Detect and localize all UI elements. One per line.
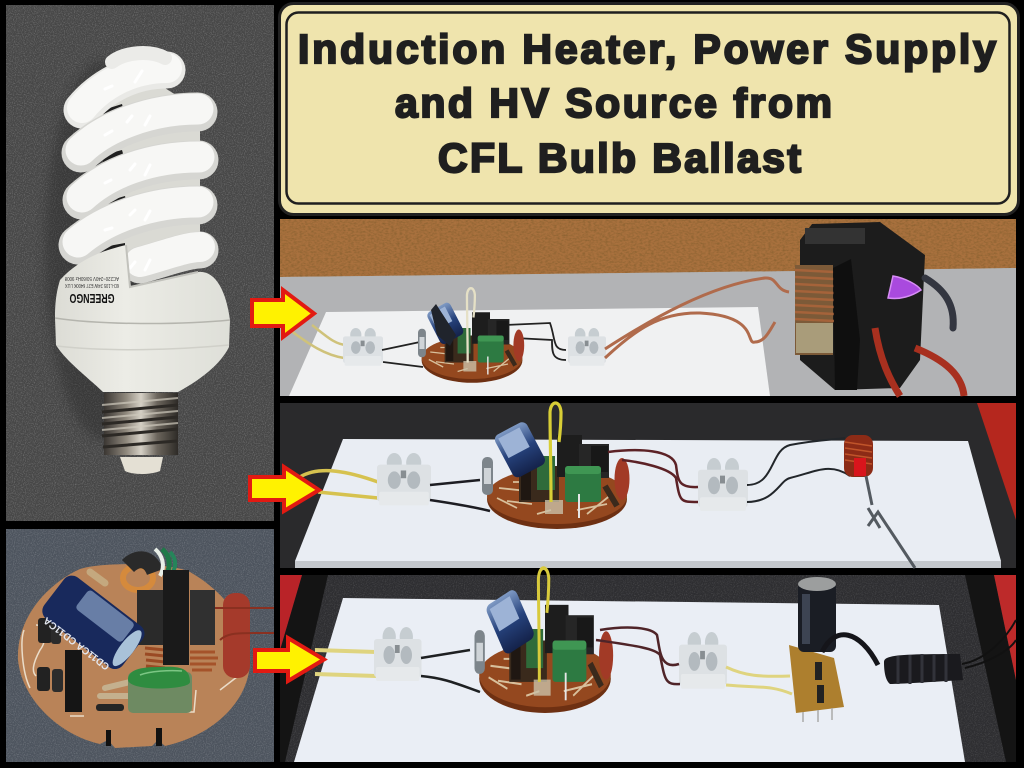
yellow input wires bbox=[315, 650, 376, 676]
tall black capacitor bbox=[798, 577, 836, 652]
yellow input wires bbox=[300, 471, 378, 498]
white board bbox=[294, 598, 965, 762]
label on bulb bbox=[65, 275, 119, 306]
resistors and diodes bbox=[37, 572, 130, 712]
terminal block right bbox=[568, 328, 606, 366]
maroon output wires bbox=[596, 628, 680, 684]
purple arc bbox=[888, 276, 921, 299]
ballast board bbox=[474, 568, 613, 713]
icon: metal screw base bbox=[102, 393, 178, 474]
metal rod and tweezers bbox=[866, 476, 915, 568]
blue electrolytic capacitor bbox=[35, 572, 148, 678]
wires to ballast bbox=[382, 323, 566, 367]
red HV wire bbox=[875, 328, 964, 396]
title text: Induction Heater, Power Supply bbox=[298, 26, 996, 72]
blue electrolytic capacitor: CD11CA CD11CA bbox=[42, 614, 112, 672]
arrow: bottom bbox=[255, 638, 324, 681]
terminal block left bbox=[343, 328, 383, 366]
terminal block left bbox=[377, 453, 431, 505]
arrow: top bbox=[252, 290, 314, 337]
title text: CFL Bulb Ballast bbox=[438, 135, 801, 181]
toroid inductor bbox=[123, 549, 175, 590]
label on bulb: AC220~240V 50/60Hz 900lf bbox=[65, 275, 119, 281]
terminal block left bbox=[374, 627, 422, 681]
icon: spiral lamp tube bbox=[78, 53, 200, 270]
arrow: middle bbox=[250, 467, 319, 511]
black clip lead bbox=[925, 278, 953, 328]
title panel bbox=[280, 4, 1018, 214]
panel: photo 3 power supply bbox=[280, 568, 1016, 762]
dark capacitor tint bbox=[431, 304, 456, 346]
white board bbox=[289, 307, 770, 396]
black output cable with grommet bbox=[822, 620, 1016, 684]
small rectifier module bbox=[789, 645, 844, 722]
flyback transformer bbox=[795, 222, 925, 390]
panel: ballast circuit board photo bbox=[6, 529, 274, 762]
transformer with copper winding bbox=[137, 570, 218, 670]
ballast board bbox=[418, 288, 524, 383]
label on bulb: 6D-L105 24W E27 6400K LUX bbox=[65, 282, 119, 288]
yellow wires to module bbox=[726, 667, 792, 694]
title text bbox=[298, 26, 996, 181]
copper wires to flyback bbox=[605, 278, 789, 358]
title text: and HV Source from bbox=[395, 80, 832, 126]
input wires bbox=[290, 325, 347, 358]
terminal block right bbox=[679, 632, 727, 689]
black wires bbox=[430, 480, 490, 511]
label on bulb: GREENGO bbox=[70, 291, 114, 306]
panel: CFL bulb photo bbox=[6, 5, 274, 521]
white board bbox=[295, 439, 1001, 568]
circuit board disc bbox=[18, 564, 250, 748]
icon: plastic lamp housing bbox=[55, 245, 230, 392]
ballast board bbox=[482, 403, 630, 529]
panel: photo 1 high-voltage flyback bbox=[280, 219, 1016, 396]
black wires bbox=[421, 650, 480, 692]
panel: photo 2 induction heater bbox=[280, 403, 1016, 568]
maroon output wires bbox=[608, 450, 698, 502]
induction coil bbox=[844, 435, 873, 477]
terminal block right bbox=[698, 458, 748, 511]
wires to coil bbox=[747, 438, 850, 502]
green film capacitor bbox=[128, 667, 192, 713]
red capacitor and wires bbox=[215, 593, 274, 678]
